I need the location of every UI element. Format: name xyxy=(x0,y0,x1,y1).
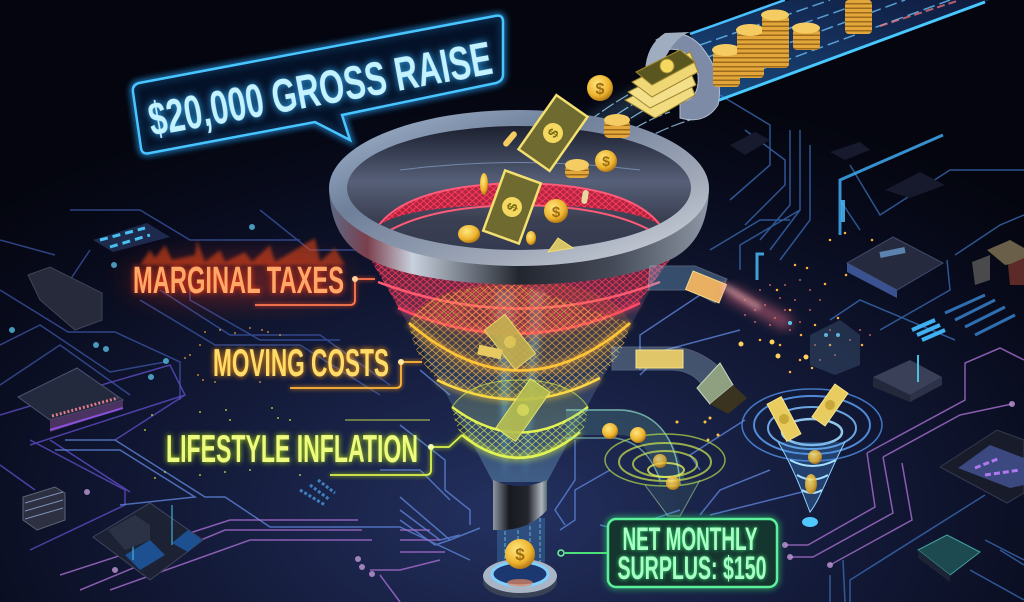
side pipe: taxes leak xyxy=(648,233,872,375)
circuit terminals xyxy=(12,227,1012,574)
pads near lower centre xyxy=(300,480,335,505)
callout: gross raise: $20,000 GROSS RAISE xyxy=(144,31,496,146)
label: moving costs: MOVING COSTS xyxy=(213,342,389,385)
funnel xyxy=(329,110,709,598)
bill: centre: $ xyxy=(503,200,521,213)
coin piles xyxy=(458,114,630,245)
side pipe: moving costs xyxy=(612,347,747,440)
coins with dollar sign: $ xyxy=(552,204,561,221)
label: lifestyle inflation xyxy=(145,408,462,478)
chip: small processor xyxy=(873,355,942,402)
label: moving costs xyxy=(185,328,422,388)
bill: centre xyxy=(483,170,541,244)
faint top right chips xyxy=(730,132,945,198)
coins with dollar sign: $ xyxy=(596,81,605,98)
stream from pipe into funnel xyxy=(480,88,690,250)
coins with dollar sign: $ xyxy=(602,153,610,169)
bill: lower partial xyxy=(548,238,573,252)
callout: net monthly surplus: SURPLUS: $150 xyxy=(618,550,766,586)
chip: left processor xyxy=(18,368,123,432)
callout: net monthly surplus: NET MONTHLY xyxy=(622,521,758,557)
funnel base with coin: $ xyxy=(515,545,525,564)
funnel interior mesh xyxy=(379,162,660,233)
coin stacks xyxy=(712,0,872,87)
funnel neck glass xyxy=(497,518,545,562)
orange mesh band xyxy=(409,280,630,400)
sparkles xyxy=(145,408,300,478)
chip: lower left cluster xyxy=(93,503,203,580)
bill: yellow band xyxy=(484,314,536,370)
coins with dollar sign xyxy=(544,75,617,223)
input pipe with coin stacks xyxy=(480,0,990,250)
spray particles xyxy=(741,233,872,372)
bundled cash xyxy=(625,50,698,118)
faint hologram xyxy=(810,320,860,375)
funnel rim xyxy=(329,188,709,284)
chip: upper left block xyxy=(28,267,102,330)
label: marginal taxes xyxy=(128,238,375,305)
colored blocks top right xyxy=(972,240,1024,285)
bill: upper: $ xyxy=(544,125,562,141)
blue ribbon connectors xyxy=(912,295,1015,340)
circuit board chips xyxy=(18,132,1024,582)
callout: net monthly surplus xyxy=(558,519,777,587)
falling money xyxy=(458,75,630,441)
funnel neck sleeve xyxy=(493,480,547,530)
callout: gross raise xyxy=(133,16,503,153)
pipe ring xyxy=(645,32,720,120)
funnel cone body xyxy=(362,240,677,482)
bill: lime band xyxy=(496,379,550,441)
label: lifestyle inflation: LIFESTYLE INFLATION xyxy=(166,428,418,471)
funnel light beams xyxy=(495,290,545,480)
flames xyxy=(140,238,345,265)
sparkles xyxy=(185,328,280,382)
chip: top right processor xyxy=(847,237,943,298)
label: marginal taxes: MARGINAL TAXES xyxy=(133,260,344,302)
bill: upper xyxy=(519,95,587,171)
lime mesh band xyxy=(452,380,588,460)
chip: upper left blue module xyxy=(93,223,170,252)
chip: green module xyxy=(918,535,980,582)
blue vortex xyxy=(742,384,882,527)
side pipe and green vortex xyxy=(566,410,725,516)
chip: server stack xyxy=(23,487,65,530)
red mesh band xyxy=(365,250,677,335)
chip: right screen xyxy=(940,430,1024,503)
small bill xyxy=(477,345,503,359)
funnel base with coin xyxy=(483,539,557,598)
